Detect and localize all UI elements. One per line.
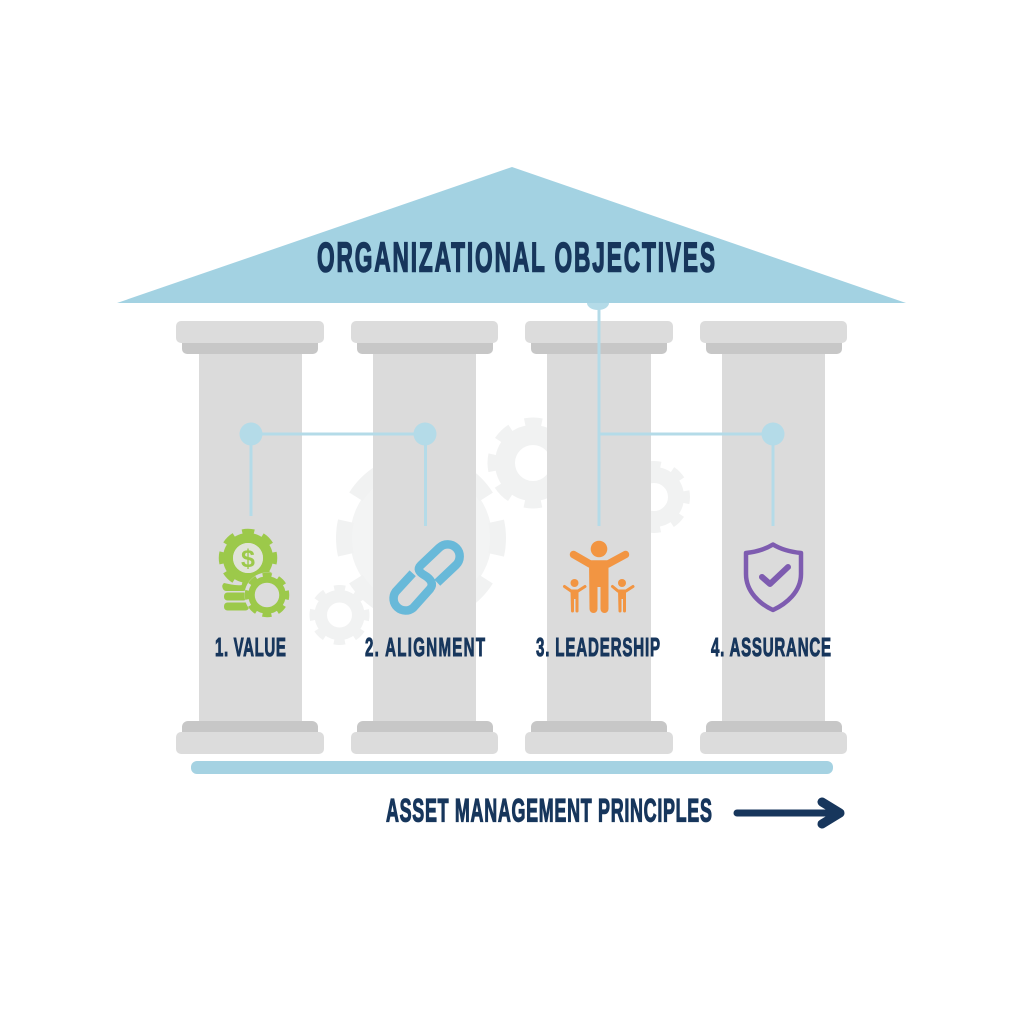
title: ORGANIZATIONAL OBJECTIVES xyxy=(317,234,715,281)
foundation bar xyxy=(191,761,833,774)
coins xyxy=(222,583,249,610)
label: 2. Alignment: 2. ALIGNMENT xyxy=(365,633,485,662)
icon: leader with people xyxy=(564,541,633,613)
icon: chain link xyxy=(394,544,460,611)
icon: gears, coins and dollar xyxy=(222,532,290,618)
footer caption: ASSET MANAGEMENT PRINCIPLES xyxy=(386,794,712,829)
pillar 4 xyxy=(700,321,847,754)
label: 1. Value: 1. VALUE xyxy=(215,633,286,662)
background gears xyxy=(312,422,686,642)
roof pediment xyxy=(117,167,906,303)
pillar 3 xyxy=(525,321,673,754)
dollar sign: $ xyxy=(241,545,255,573)
arrow xyxy=(737,802,840,824)
label: 4. Assurance: 4. ASSURANCE xyxy=(711,633,831,662)
label: 3. Leadership: 3. LEADERSHIP xyxy=(536,633,660,662)
pillar 2 xyxy=(351,321,498,754)
connector lines and nodes xyxy=(240,303,784,526)
icon: shield with check xyxy=(746,544,801,610)
pillar 1 xyxy=(176,321,324,754)
